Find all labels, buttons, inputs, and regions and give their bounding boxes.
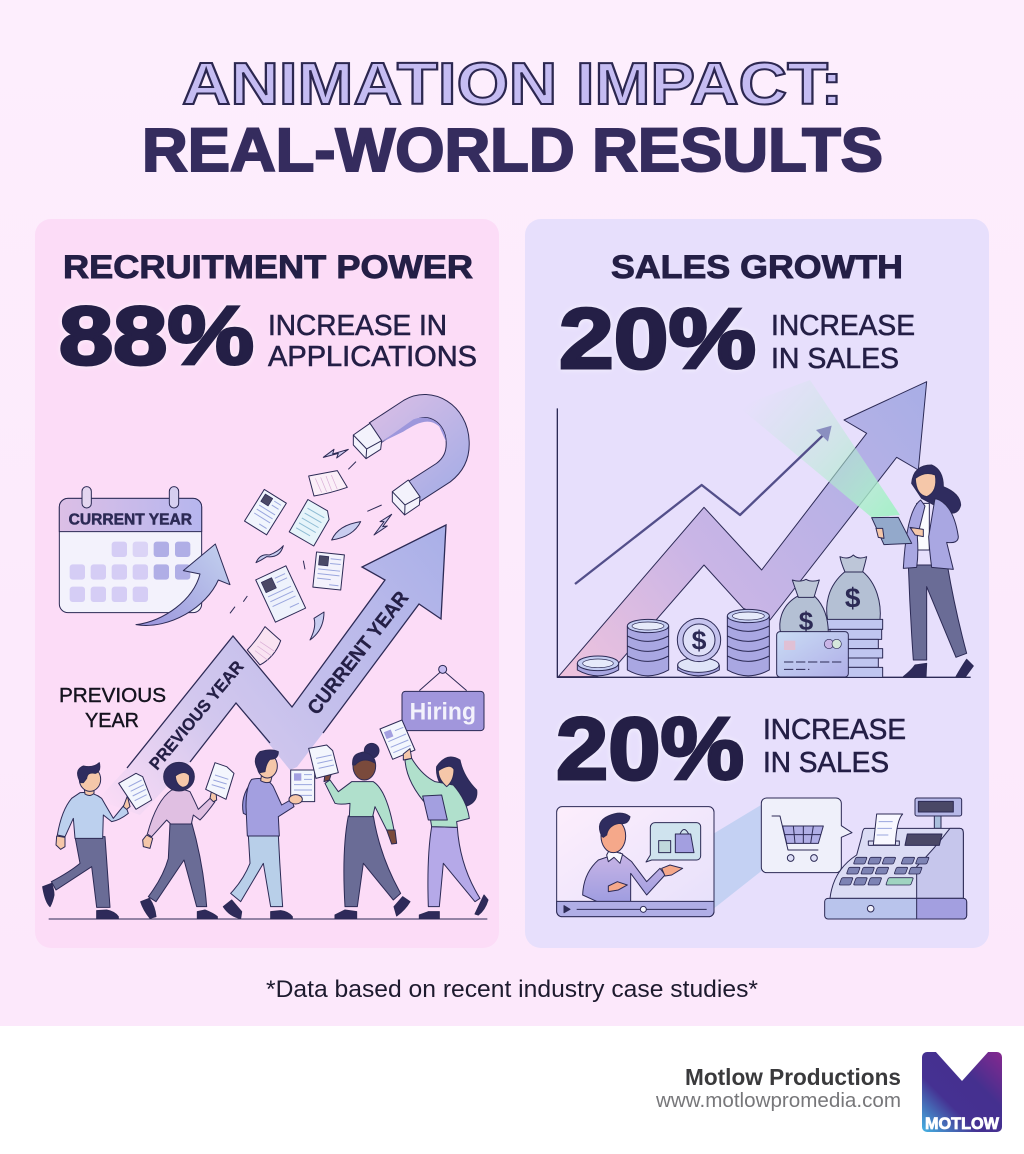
dollar sign: $ <box>692 625 707 655</box>
progress knob <box>640 906 646 912</box>
illustration upper: calendar, magnet and documents <box>59 406 458 665</box>
arrow text: previous year: PREVIOUS YEAR <box>146 657 247 774</box>
person 1 doc <box>119 773 152 809</box>
panel: sales growth <box>525 219 989 948</box>
magnet pole top <box>353 423 382 459</box>
arrow text: current year: CURRENT YEAR <box>304 587 414 719</box>
title <box>142 51 883 184</box>
brand url: www.motlowpromedia.com <box>655 1090 901 1112</box>
video and register illustration <box>557 798 967 919</box>
person 1 head <box>79 767 101 791</box>
paper scrap 1 <box>332 522 361 540</box>
calendar ring right <box>169 487 179 508</box>
row 1 <box>112 542 190 557</box>
dollar coin face <box>677 618 721 662</box>
bag front tie <box>792 579 819 597</box>
paper scrap 3 <box>310 612 324 640</box>
label word previous: PREVIOUS <box>59 685 166 707</box>
spark 3 <box>230 462 382 613</box>
person 5 face <box>438 766 454 787</box>
cart grid <box>784 826 821 843</box>
icon: calendar <box>59 487 202 613</box>
sign pin <box>439 665 447 673</box>
person 4 <box>309 743 410 919</box>
shopping bubble <box>646 823 701 862</box>
register body <box>830 828 963 898</box>
person 1 legs <box>51 837 110 907</box>
person 5 legs <box>428 827 480 907</box>
calendar header <box>59 498 202 532</box>
footnote: *Data based on recent industry case studies* <box>266 976 758 1003</box>
presenter head <box>601 819 626 853</box>
money bag rear <box>827 555 880 620</box>
logo <box>922 1051 1002 1133</box>
curled doc top <box>309 471 347 496</box>
woman shoes <box>903 659 973 677</box>
dollar coin base <box>678 665 719 676</box>
stat 20% top: 20% <box>559 292 756 387</box>
person 1 <box>43 763 152 919</box>
woman blazer right <box>929 498 958 569</box>
coin stack 1 inner <box>632 622 664 630</box>
sign string <box>419 670 467 691</box>
sign text: Hiring <box>410 698 476 725</box>
icon: magnet <box>353 406 458 515</box>
bottom label line 2: IN SALES <box>763 747 889 779</box>
drawer knob <box>867 905 874 912</box>
presenter collar <box>607 850 623 863</box>
person 2 torso <box>147 789 215 837</box>
person 4 feet <box>335 897 410 919</box>
footer band <box>0 1026 1024 1154</box>
note 1 <box>825 619 883 629</box>
growth arrow large <box>97 525 446 815</box>
woman hair <box>912 465 961 513</box>
person 1 hair <box>78 763 100 783</box>
coin flat body <box>577 663 619 676</box>
register keys <box>839 857 929 885</box>
coin stack 2 bands <box>727 626 769 661</box>
label word year: YEAR <box>85 710 139 732</box>
stat 88%: 88% <box>59 289 254 382</box>
bag front dollar: $ <box>799 606 814 636</box>
register side <box>917 828 963 898</box>
card chip <box>784 641 795 650</box>
calendar day cells <box>70 542 190 602</box>
person 1 torso <box>57 793 128 838</box>
chart axes <box>557 408 971 677</box>
brand name: Motlow Productions <box>685 1064 901 1090</box>
key row 3 <box>839 878 913 885</box>
person 5 hair <box>436 757 477 806</box>
resume 4 <box>256 566 306 622</box>
person 3 back pack <box>243 782 252 817</box>
icon: sparks <box>230 449 392 613</box>
stat label bottom <box>763 714 906 779</box>
woman pants <box>908 565 967 660</box>
presenter hands <box>608 865 683 892</box>
label line 1: INCREASE IN <box>268 310 447 342</box>
woman tablet <box>872 517 912 545</box>
chart illustration <box>557 380 973 677</box>
trend polyline <box>575 435 823 584</box>
panel: recruitment power <box>35 219 499 948</box>
coin stack 1 bands <box>627 636 669 661</box>
arrow outline lower <box>190 703 270 762</box>
calendar body <box>59 498 202 613</box>
large bag <box>675 834 694 853</box>
note 3 <box>830 639 878 649</box>
register display post <box>934 815 941 828</box>
magnet outline <box>375 406 458 492</box>
drawer side <box>917 898 967 919</box>
player bar <box>557 901 714 917</box>
logo wordmark: MOTLOW <box>925 1114 1000 1133</box>
cart wheels <box>787 855 817 861</box>
coin stack 2 top <box>727 609 769 623</box>
note 5 <box>830 658 878 667</box>
large bag handle <box>680 829 689 834</box>
cart bubble body <box>761 798 852 873</box>
ground line <box>49 917 487 920</box>
play button <box>564 906 570 913</box>
person 4 head <box>353 752 376 780</box>
calendar ring left <box>82 487 91 508</box>
person 5 tablet <box>423 795 447 820</box>
panel background right <box>525 219 989 948</box>
person 3 doc <box>291 770 315 802</box>
row 2 <box>70 564 190 580</box>
dollar coin inner <box>683 624 715 656</box>
progress line <box>577 908 707 911</box>
person 3 head <box>257 754 277 778</box>
person 3 hand <box>289 795 302 804</box>
arrow body <box>97 525 446 815</box>
spark 1 <box>323 449 348 458</box>
paper scrap 2 <box>256 546 283 563</box>
person 1 neck <box>84 787 94 796</box>
video frame <box>557 807 714 917</box>
money bag front <box>780 579 828 636</box>
stat 20% bottom: 20% <box>556 699 744 798</box>
credit card <box>777 632 848 677</box>
presenter hair <box>599 813 630 837</box>
woman blazer left <box>903 500 925 568</box>
people group <box>43 665 488 919</box>
coin stack 1 top <box>627 619 669 633</box>
key row 1 <box>853 857 929 864</box>
chart beam <box>738 380 900 517</box>
stat label <box>268 310 477 373</box>
chart big arrow <box>558 382 927 677</box>
person 5 feet <box>419 895 488 919</box>
label: previous year <box>59 685 166 732</box>
register screen <box>905 834 942 845</box>
register slot <box>868 841 899 845</box>
card stripes <box>784 662 842 669</box>
title line 1: ANIMATION IMPACT: <box>182 51 843 117</box>
coin flat <box>577 656 619 676</box>
note 4 <box>830 649 883 658</box>
person 2 face <box>175 772 190 787</box>
person 3 neck <box>261 774 273 783</box>
coin stack 2 inner <box>732 612 764 620</box>
card body <box>777 632 848 677</box>
banknote stack <box>825 619 883 677</box>
display screen <box>918 801 953 812</box>
person 5 <box>380 720 488 919</box>
light beam <box>714 804 763 908</box>
row 3 <box>70 587 148 602</box>
person 5 hand <box>403 749 412 760</box>
receipt lines <box>877 822 893 835</box>
person 4 doc <box>309 745 338 778</box>
stat label line 2: IN SALES <box>771 343 899 375</box>
doc 2 <box>289 499 332 546</box>
register display <box>915 798 962 816</box>
panel background left <box>35 219 499 948</box>
bag rear dollar: $ <box>845 582 861 613</box>
hiring sign <box>402 665 484 731</box>
person 4 bun <box>364 743 379 758</box>
dollar coin base top <box>678 658 719 672</box>
coin stack 2 body <box>727 616 769 676</box>
documents flying <box>245 471 361 665</box>
register drawer <box>825 898 967 919</box>
cart bubble <box>761 798 852 873</box>
person 2 hands <box>143 790 217 848</box>
heading: recruitment power: RECRUITMENT POWER <box>63 249 473 285</box>
person 4 legs <box>344 816 401 907</box>
person 3 feet <box>223 900 292 919</box>
bag rear tie <box>840 555 867 572</box>
dollar coin <box>677 618 721 676</box>
person 3 hair <box>255 750 278 773</box>
receipt <box>873 814 903 845</box>
woman face <box>915 473 936 497</box>
person 4 hair <box>353 753 375 765</box>
person 2 <box>141 762 234 919</box>
magnet band <box>375 406 458 492</box>
coin stack 1 body <box>627 626 669 676</box>
small bag <box>659 841 671 853</box>
stat label line 1: INCREASE <box>771 310 915 342</box>
person 2 legs <box>148 823 207 907</box>
person 3 torso <box>246 779 294 836</box>
person 4 torso <box>325 780 394 830</box>
heading: sales growth: SALES GROWTH <box>611 249 903 285</box>
cart handle <box>772 816 818 850</box>
icon: curved arrow <box>136 544 230 625</box>
person 1 hands <box>56 796 130 849</box>
magnet pole bottom <box>392 480 420 515</box>
cash register <box>825 798 967 919</box>
person 2 hair <box>164 762 194 791</box>
calendar title: CURRENT YEAR <box>69 512 192 529</box>
person 5 doc <box>380 720 415 759</box>
arrow outline <box>127 525 446 768</box>
presenter torso <box>583 853 665 902</box>
trend arrowhead <box>816 426 832 442</box>
coin flat inner <box>583 659 613 668</box>
stat label top <box>771 310 915 375</box>
person 1 feet <box>43 883 118 919</box>
person 4 hands <box>324 773 397 844</box>
note 2 <box>830 629 882 639</box>
logo square <box>922 1052 1002 1132</box>
logo notch <box>935 1051 989 1081</box>
magnet inner depth <box>381 418 446 443</box>
woman hands <box>876 527 923 538</box>
cart basket <box>783 826 823 843</box>
video player <box>557 807 714 917</box>
curled doc lower <box>247 627 281 665</box>
card logo left <box>824 639 834 649</box>
key row 2 <box>846 867 922 874</box>
person 2 feet <box>141 898 217 919</box>
person 5 torso <box>405 758 469 827</box>
coin flat top <box>577 656 619 671</box>
person 3 legs <box>231 835 283 907</box>
coin stack 1 <box>627 619 669 676</box>
coin stack 2 <box>727 609 769 676</box>
woman shirt <box>917 503 929 550</box>
thin trend line <box>575 426 832 584</box>
woman with tablet <box>872 465 973 677</box>
bag front body <box>780 597 828 633</box>
person 3 <box>223 750 315 919</box>
note 6 <box>830 667 883 677</box>
card logo right <box>832 639 841 649</box>
bag rear body <box>827 572 880 620</box>
resume 1 <box>245 489 286 535</box>
bottom label line 1: INCREASE <box>763 714 906 746</box>
label line 2: APPLICATIONS <box>268 341 477 373</box>
resume 3 <box>313 552 344 590</box>
sign board <box>402 691 484 731</box>
person 2 doc <box>206 763 234 799</box>
title line 2: REAL-WORLD RESULTS <box>142 116 883 184</box>
spark 2 <box>374 514 392 535</box>
